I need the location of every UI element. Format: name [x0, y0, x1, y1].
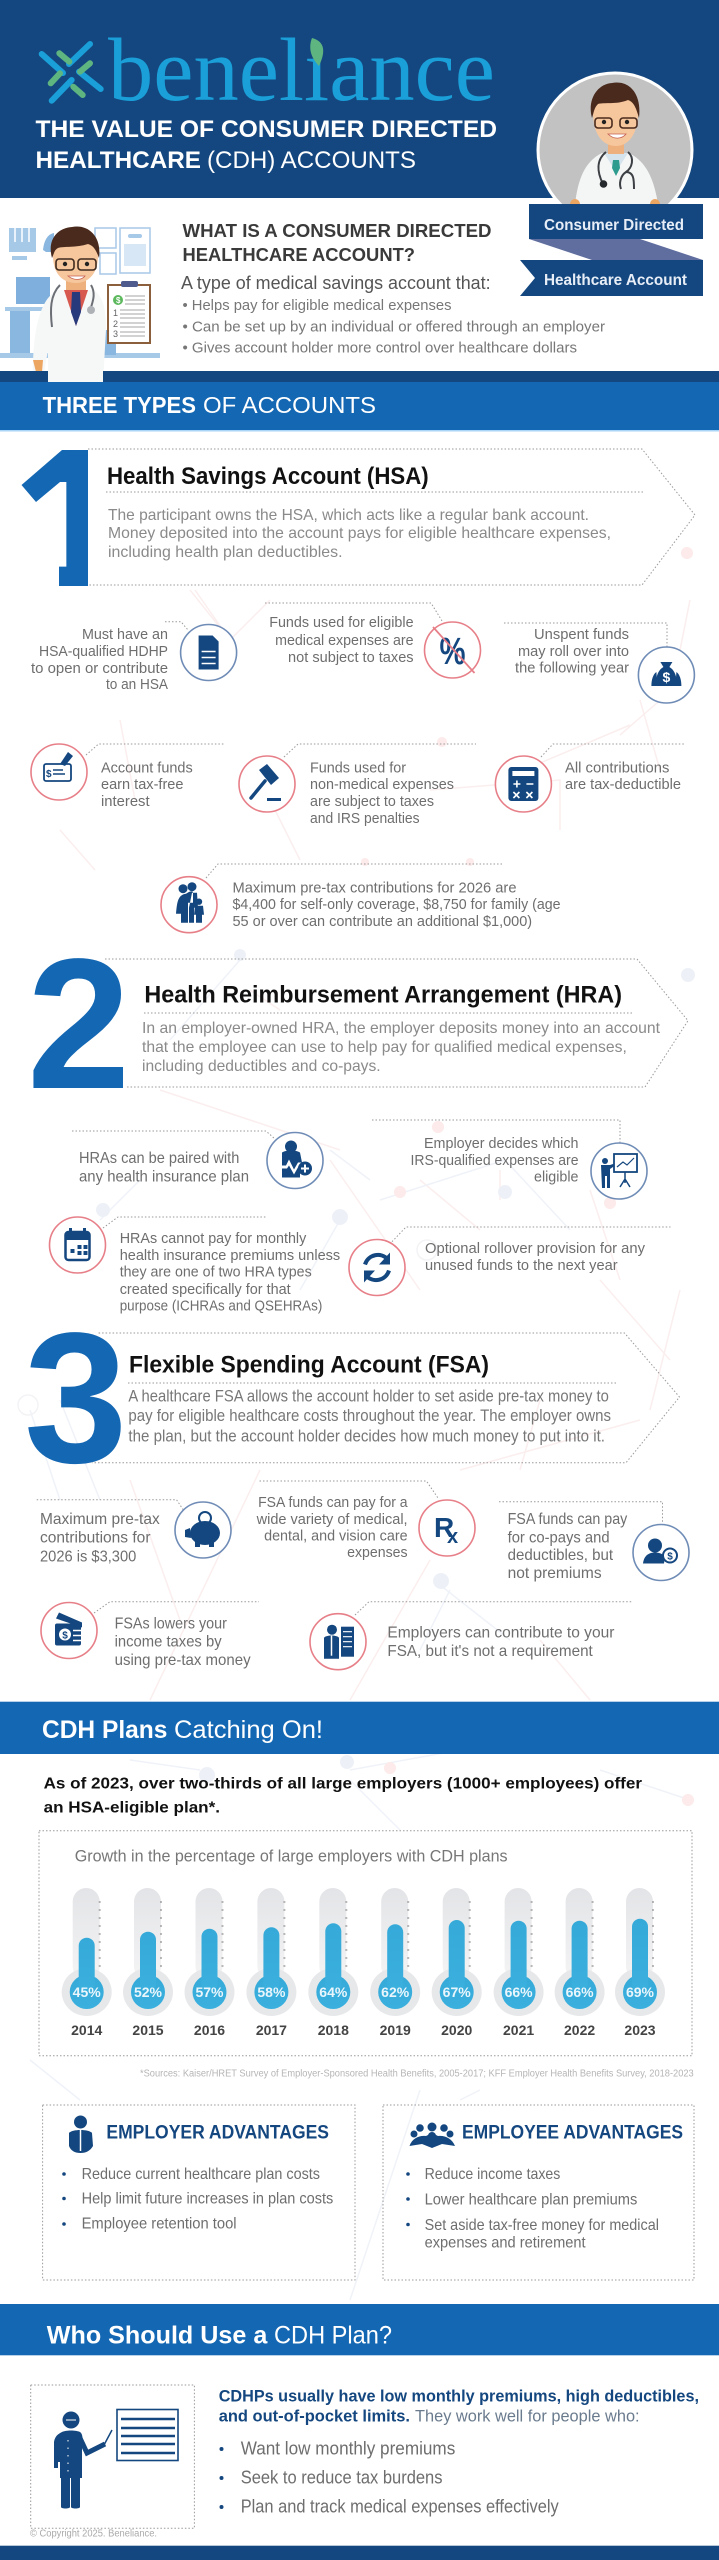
FSA description: pay for eligible healthcare costs throughout the year. The employer owns: [128, 1406, 611, 1425]
thermometer 2015: 2015: [132, 2022, 164, 2038]
HSA description: [108, 507, 611, 561]
thermometer 2017: 58%: [257, 1984, 286, 2000]
icon: cheque and pen: $: [46, 769, 52, 780]
HRA item: monthly premiums: [50, 1217, 340, 1315]
FSA description: the plan, but the account holder decides how much money to put into it.: [128, 1427, 605, 1446]
HSA item: HDHP: to open or contribute: [31, 660, 168, 677]
statement: large employers: [44, 1776, 642, 1817]
HSA item: HDHP: Must have an: [82, 626, 168, 643]
HSA chevron outline: [88, 449, 695, 585]
HSA item: tax-free interest: earn tax-free: [101, 776, 184, 793]
thermometer 2020: [432, 1888, 482, 2038]
HRA item: rollover provision: unused funds to the next year: [425, 1257, 618, 1274]
thermometer 2022: 2022: [564, 2022, 595, 2038]
thermometer 2017: 2017: [256, 2022, 287, 2038]
panel: FSA: [24, 1295, 680, 1502]
FSA item: maximum contributions: [37, 1500, 231, 1566]
number 3: 3: [24, 1295, 127, 1502]
section band: three types of accounts: OF ACCOUNTS: [203, 392, 376, 418]
FSA item: wide variety: [256, 1481, 475, 1561]
FSA item: co-pays and deductibles: deductibles, but: [508, 1547, 614, 1564]
who should use text: Seek to reduce tax burdens: [241, 2467, 442, 2487]
what is a CDH account text: HEALTHCARE ACCOUNT?: [182, 244, 415, 265]
HSA item: non-medical expenses: non-medical expenses: [310, 776, 454, 793]
thermometer 2023: [615, 1888, 665, 2038]
HRA heading: Health Reimbursement Arrangement (HRA): [144, 982, 622, 1009]
section band: three types of accounts: [0, 371, 719, 432]
number 2: 2: [27, 921, 130, 1128]
what is a CDH account text: • Helps pay for eligible medical expenses: [182, 298, 452, 314]
HRA item: monthly premiums: purpose (ICHRAs and QSEHRAs): [120, 1298, 322, 1315]
HSA item: maximum contributions: $4,400 for self-only coverage, $8,750 for family (age: [232, 896, 560, 913]
FSA chevron outline: [92, 1333, 680, 1463]
icon: percent crossed out: %: [440, 631, 466, 673]
HSA description: including health plan deductibles.: [108, 544, 342, 561]
icon: Rx: x: [447, 1526, 458, 1548]
HSA item: tax-free interest: interest: [101, 793, 150, 810]
HRA item: rollover provision: [349, 1227, 670, 1296]
HRA item: monthly premiums: they are one of two HRA types: [120, 1264, 312, 1281]
thermometer 2014: 2014: [71, 2022, 102, 2038]
FSA item: wide variety: dental, and vision care: [264, 1528, 408, 1545]
thermometer 2016: 2016: [194, 2022, 225, 2038]
FSA item: co-pays and deductibles: FSA funds can pay: [508, 1511, 627, 1528]
what is a CDH account text: A type of medical savings account that:: [181, 273, 491, 293]
panel: employer advantages: [43, 2105, 355, 2280]
header band: [0, 0, 719, 198]
panel: HSA: [22, 448, 696, 586]
HRA description: that the employee can use to help pay for qualified medical expenses,: [142, 1039, 627, 1056]
HSA item: HDHP: HSA-qualified HDHP: [39, 643, 168, 660]
HSA item: HDHP: to an HSA: [106, 676, 168, 693]
FSA item: employer contributions: Employers can contribute to your: [387, 1625, 615, 1642]
who should use text: [219, 2388, 699, 2516]
ribbon banner: consumer directed / healthcare account: Consumer Directed: [544, 217, 684, 234]
panel: employee advantages: [383, 2105, 694, 2280]
number 1: 1: [22, 415, 128, 627]
icon: person with dollar: $: [667, 1552, 673, 1562]
what is a CDH account text: • Gives account holder more control over healthcare dollars: [182, 341, 577, 357]
icon: person with dollar: [643, 1538, 677, 1564]
HRA item: employer decides: IRS-qualified expenses are: [410, 1152, 578, 1169]
section band: CDH plans catching on: Catching On!: [174, 1716, 323, 1744]
icon: employer with form: [324, 1625, 354, 1659]
HSA item: tax-deductible: All contributions: [565, 760, 669, 777]
HSA description: The participant owns the HSA, which acts like a regular bank account.: [108, 507, 589, 524]
list: Reduce current healthcare plan costs: [82, 2166, 320, 2183]
list: [406, 2166, 659, 2251]
FSA description: A healthcare FSA allows the account holder to set aside pre-tax money to: [128, 1387, 609, 1406]
HSA item: non-medical expenses: and IRS penalties: [310, 810, 420, 827]
HSA item: tax-free interest: [31, 744, 224, 810]
title: [36, 116, 497, 174]
section band: who should use a CDH plan: CDH Plan?: [274, 2321, 392, 2349]
what is a CDH account text: [181, 220, 605, 357]
thermometer 2019: [370, 1888, 420, 2038]
icon: cheque and pen: [44, 752, 73, 781]
FSA item: wide variety: wide variety of medical,: [256, 1511, 408, 1528]
HSA item: rollover: [504, 623, 694, 703]
heading: EMPLOYER ADVANTAGES: [106, 2122, 329, 2143]
who should use text: Want low monthly premiums: [241, 2438, 455, 2458]
icon: money bags: [651, 662, 681, 686]
doctor illustration with clipboard: 1: [113, 308, 118, 318]
icon: presenter with chart: [601, 1154, 637, 1188]
thermometer 2021: 66%: [505, 1984, 533, 2000]
list: [62, 2166, 333, 2233]
FSA item: wide variety: FSA funds can pay for a: [258, 1494, 408, 1511]
list: Employee retention tool: [82, 2216, 237, 2233]
icon: cash stack: $: [62, 1630, 68, 1642]
icon: employee group: [410, 2122, 455, 2148]
HRA description: including deductibles and co-pays.: [142, 1058, 381, 1075]
HSA description: Money deposited into the account pays for eligible healthcare expenses,: [108, 525, 611, 542]
list: Set aside tax-free money for medical: [425, 2217, 659, 2234]
thermometer 2023: 69%: [626, 1984, 655, 2000]
thermometer 2014: 45%: [73, 1984, 101, 2000]
HSA item: tax-deductible: are tax-deductible: [565, 776, 681, 793]
FSA item: co-pays and deductibles: for co-pays and: [508, 1529, 610, 1546]
ribbon banner: consumer directed / healthcare account: [520, 204, 703, 296]
who should use text: and out-of-pocket limits.: [219, 2408, 410, 2426]
thermometer 2021: 2021: [503, 2022, 534, 2038]
FSA item: maximum contributions: contributions for: [40, 1530, 151, 1547]
icon: gavel: [251, 764, 281, 801]
FSA item: co-pays and deductibles: not premiums: [508, 1565, 602, 1582]
HSA item: rollover: the following year: [515, 660, 629, 677]
doctor illustration with clipboard: [0, 227, 160, 382]
background network pattern: [18, 547, 695, 2300]
HRA item: monthly premiums: HRAs cannot pay for monthly: [120, 1230, 307, 1247]
statement: large employers: As of 2023, over two-thirds of all large employers (1000+ employees) offer: [44, 1776, 642, 1793]
coat overlap over section band: [48, 371, 103, 382]
list: expenses and retirement: [425, 2234, 586, 2251]
FSA item: employer contributions: FSA, but it's not a requirement: [387, 1643, 593, 1660]
icon: calendar: [66, 1228, 90, 1260]
FSA item: lowers income taxes: [41, 1602, 259, 1669]
HRA item: paired with any plan: HRAs can be paired with: [79, 1150, 239, 1167]
icon: refresh arrows: [364, 1252, 390, 1282]
HSA item: not subject to taxes: [265, 603, 480, 678]
FSA description: [128, 1387, 611, 1446]
doctor illustration with clipboard: 2: [113, 319, 118, 329]
HRA item: employer decides: Employer decides which: [424, 1135, 578, 1152]
thermometer 2022: [555, 1888, 605, 2038]
HRA description: [142, 1020, 661, 1075]
statement: large employers: an HSA-eligible plan*.: [44, 1800, 220, 1817]
footer band: [0, 2546, 719, 2560]
FSA item: lowers income taxes: FSAs lowers your: [115, 1615, 227, 1632]
heading: EMPLOYEE ADVANTAGES: [462, 2122, 683, 2143]
HSA item: maximum contributions: Maximum pre-tax contributions for 2026 are: [232, 880, 516, 897]
HSA item: not subject to taxes: not subject to taxes: [288, 649, 414, 666]
HSA item: tax-deductible: [495, 744, 686, 812]
HSA item: rollover: may roll over into: [518, 643, 629, 660]
icon: document: [199, 636, 219, 670]
thermometer 2019: 2019: [380, 2022, 411, 2038]
thermometer 2014: [62, 1888, 112, 2038]
FSA item: lowers income taxes: income taxes by: [115, 1634, 222, 1651]
HSA item: maximum contributions: [161, 864, 560, 933]
icon: presenter with board: [54, 2410, 178, 2508]
thermometer 2023: 2023: [624, 2022, 656, 2038]
HRA item: monthly premiums: created specifically for that: [120, 1281, 291, 1298]
thermometer 2019: 62%: [381, 1984, 410, 2000]
HSA item: non-medical expenses: are subject to taxes: [310, 793, 434, 810]
HSA item: non-medical expenses: [239, 744, 476, 827]
thermometer 2015: [123, 1888, 173, 2038]
list: Reduce income taxes: [425, 2166, 560, 2183]
ribbon banner: consumer directed / healthcare account: Healthcare Account: [544, 272, 687, 289]
section band: three types of accounts: THREE TYPES: [43, 392, 196, 418]
title: HEALTHCARE: [36, 147, 201, 174]
number 1: [22, 450, 88, 586]
HSA item: HDHP: [31, 622, 237, 693]
logo: beneliance: beneliance: [108, 21, 495, 120]
HRA item: rollover provision: Optional rollover provision for any: [425, 1240, 645, 1257]
what is a CDH account text: • Can be set up by an individual or offered through an employer: [182, 320, 605, 336]
chart panel: thermometer chart: [39, 1831, 692, 2056]
illustration: doctor portrait: [536, 72, 694, 204]
thermometer 2016: 57%: [195, 1984, 224, 2000]
thermometer 2018: [308, 1888, 358, 2038]
icon: family: [176, 882, 204, 923]
HSA item: not subject to taxes: medical expenses are: [275, 632, 414, 649]
thermometer 2016: [184, 1888, 234, 2038]
chart title: Growth in the percentage of large employers with CDH plans: [75, 1847, 508, 1866]
icon: money bags: $: [663, 669, 671, 685]
HSA heading: Health Savings Account (HSA): [107, 463, 429, 490]
list: Lower healthcare plan premiums: [425, 2191, 637, 2208]
icon: employer: [69, 2116, 93, 2153]
thermometer 2020: 2020: [441, 2022, 472, 2038]
doctor illustration with clipboard: 3: [113, 329, 118, 339]
who should use text: CDHPs usually have low monthly premiums, high deductibles,: [219, 2388, 699, 2406]
copyright: © Copyright 2025. Beneliance.: [30, 2529, 157, 2540]
section band: CDH plans catching on: CDH Plans: [42, 1716, 167, 1744]
FSA item: co-pays and deductibles: [499, 1502, 689, 1582]
FSA item: wide variety: expenses: [347, 1544, 408, 1561]
HSA item: not subject to taxes: Funds used for eligible: [269, 614, 414, 631]
icon: health plan person: [282, 1140, 312, 1178]
HSA item: non-medical expenses: Funds used for: [310, 760, 406, 777]
thermometer 2018: 64%: [319, 1984, 348, 2000]
title: THE VALUE OF CONSUMER DIRECTED: [36, 116, 497, 143]
HSA item: maximum contributions: 55 or over can contribute an additional $1,000): [232, 913, 532, 930]
HRA item: paired with any plan: [72, 1131, 323, 1188]
icon: Rx: R: [434, 1512, 454, 1543]
thermometer 2015: 52%: [134, 1984, 163, 2000]
section band: who should use a CDH plan: [0, 2304, 719, 2355]
sources note: *Sources: Kaiser/HRET Survey of Employer-Sponsored Health Benefits, 2005-2017; KFF Employer Health Benefits Survey, 2018-2023: [140, 2069, 694, 2080]
HRA item: monthly premiums: health insurance premiums unless: [120, 1247, 340, 1264]
icon: piggy bank: [185, 1512, 220, 1547]
HRA description: In an employer-owned HRA, the employer deposits money into an account: [142, 1020, 661, 1037]
icon: calculator: [508, 767, 538, 801]
thermometer 2018: 2018: [318, 2022, 349, 2038]
section band: CDH plans catching on: [0, 1702, 719, 1754]
doctor illustration with clipboard: $: [116, 296, 121, 305]
section band: who should use a CDH plan: Who Should Use a: [47, 2321, 268, 2349]
thermometer 2021: [494, 1888, 544, 2038]
HSA item: tax-free interest: Account funds: [101, 760, 193, 777]
who should use text: Plan and track medical expenses effectively: [241, 2496, 559, 2516]
HRA chevron outline: [105, 959, 688, 1087]
panel: HRA: [27, 921, 688, 1128]
title: (CDH) ACCOUNTS: [207, 147, 416, 174]
FSA item: employer contributions: [310, 1602, 632, 1670]
panel: doctor at board icon: [31, 2385, 194, 2528]
FSA item: maximum contributions: 2026 is $3,300: [40, 1549, 136, 1566]
HRA item: employer decides: [372, 1120, 647, 1199]
thermometer 2022: 66%: [566, 1984, 594, 2000]
FSA item: lowers income taxes: using pre-tax money: [115, 1652, 251, 1669]
HSA item: rollover: Unspent funds: [534, 626, 629, 643]
icon: cash stack: [55, 1612, 85, 1646]
list: Help limit future increases in plan costs: [82, 2191, 333, 2208]
FSA heading: Flexible Spending Account (FSA): [129, 1352, 489, 1379]
thermometer 2020: 67%: [443, 1984, 471, 2000]
who should use text: They work well for people who:: [415, 2408, 640, 2426]
HRA item: employer decides: eligible: [534, 1169, 578, 1186]
thermometer 2017: [246, 1888, 296, 2038]
HRA item: paired with any plan: any health insurance plan: [79, 1169, 249, 1186]
FSA item: maximum contributions: Maximum pre-tax: [40, 1511, 160, 1528]
what is a CDH account text: WHAT IS A CONSUMER DIRECTED: [182, 220, 492, 241]
